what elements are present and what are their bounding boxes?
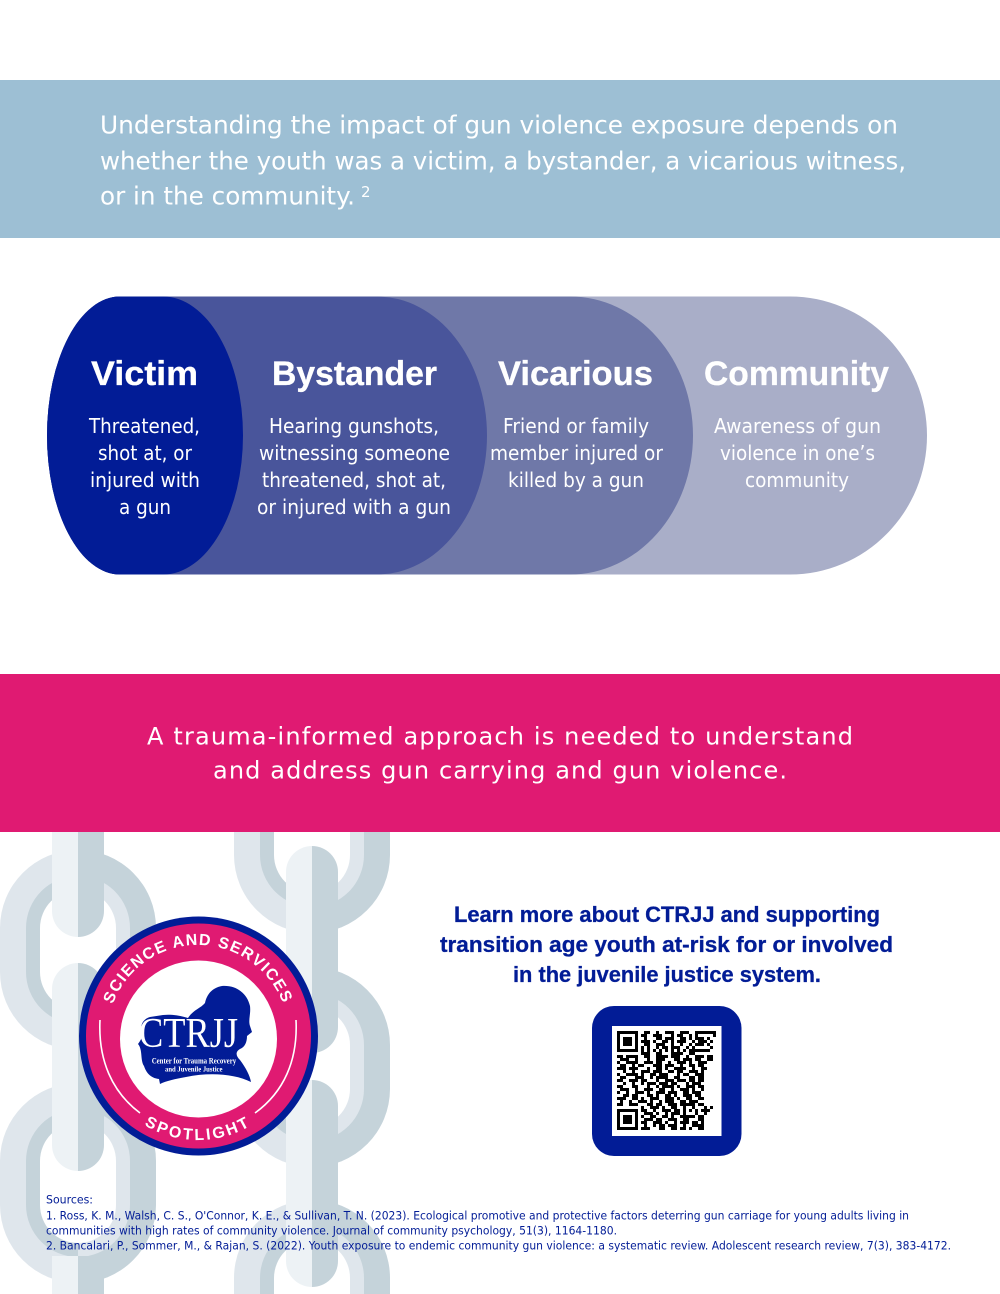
category: victim: a gun (119, 495, 171, 519)
category: victim: Victim (91, 355, 198, 393)
icon: CTRJJ silhouette logo: and Juvenile Justice (165, 1066, 222, 1074)
sources: 2. Bancalari, P., Sommer, M., & Rajan, S. (2022). Youth exposure to endemic community gun violence: a systematic review. Adolescent research review, 7(3), 383-4172. (46, 1238, 951, 1252)
badge: science and services spotlight (79, 916, 318, 1156)
category: community: violence in one’s (720, 441, 875, 465)
category: victim: injured with (90, 468, 200, 492)
top banner: or in the community. (100, 182, 355, 210)
category: vicarious: Friend or family (503, 414, 649, 438)
category: vicarious: member injured or (490, 441, 664, 465)
icon: CTRJJ silhouette logo: Center for Trauma Recovery (152, 1057, 236, 1066)
top banner (0, 80, 1000, 238)
icon: CTRJJ silhouette logo: CTRJJ (139, 1011, 238, 1057)
top banner: Understanding the impact of gun violence exposure depends on (100, 110, 898, 140)
category: community: Awareness of gun (714, 414, 881, 438)
category: bystander: or injured with a gun (257, 495, 451, 519)
sources: Sources: (46, 1192, 93, 1206)
category: bystander: threatened, shot at, (262, 468, 446, 492)
category: vicarious: Vicarious (498, 355, 653, 393)
learn more heading (440, 902, 893, 987)
category: vicarious: killed by a gun (508, 468, 644, 492)
category: bystander: witnessing someone (259, 441, 450, 465)
category: community: Community (704, 355, 889, 393)
learn more heading: Learn more about CTRJJ and supporting (454, 902, 880, 927)
icon: CTRJJ silhouette logo (138, 986, 252, 1084)
pink callout banner: and address gun carrying and gun violence. (213, 756, 787, 784)
category: victim: Threatened, (88, 414, 200, 438)
category: vicarious (47, 296, 693, 574)
category: community (47, 296, 927, 574)
sources: 1. Ross, K. M., Walsh, C. S., O'Connor, K. E., & Sullivan, T. N. (2023). Ecological promotive and protective factors deterring gun carriage for young adults living in (46, 1208, 909, 1222)
learn more heading: in the juvenile justice system. (513, 962, 821, 987)
category: victim: shot at, or (98, 441, 193, 465)
category: community: community (745, 468, 849, 492)
badge: science and services spotlight: SPOTLIGHT (146, 1116, 247, 1140)
QR code (592, 1006, 742, 1156)
sources (46, 1192, 951, 1252)
badge: science and services spotlight: SCIENCE AND SERVICES (104, 934, 292, 1003)
exposure categories diagram (47, 296, 927, 574)
top banner: 2 (361, 183, 371, 201)
learn more heading: transition age youth at-risk for or involved (440, 932, 893, 957)
background chain illustration (0, 733, 390, 1294)
pink callout banner (0, 674, 1000, 832)
category: bystander (47, 296, 487, 574)
sources: communities with high rates of community violence. Journal of community psychology, 51(3), 1164-1180. (46, 1224, 617, 1238)
category: bystander: Bystander (272, 355, 437, 393)
pink callout banner: A trauma-informed approach is needed to understand (147, 722, 853, 750)
category: victim (47, 296, 243, 574)
category: bystander: Hearing gunshots, (269, 414, 439, 438)
top banner: whether the youth was a victim, a bystander, a vicarious witness, (100, 146, 906, 176)
